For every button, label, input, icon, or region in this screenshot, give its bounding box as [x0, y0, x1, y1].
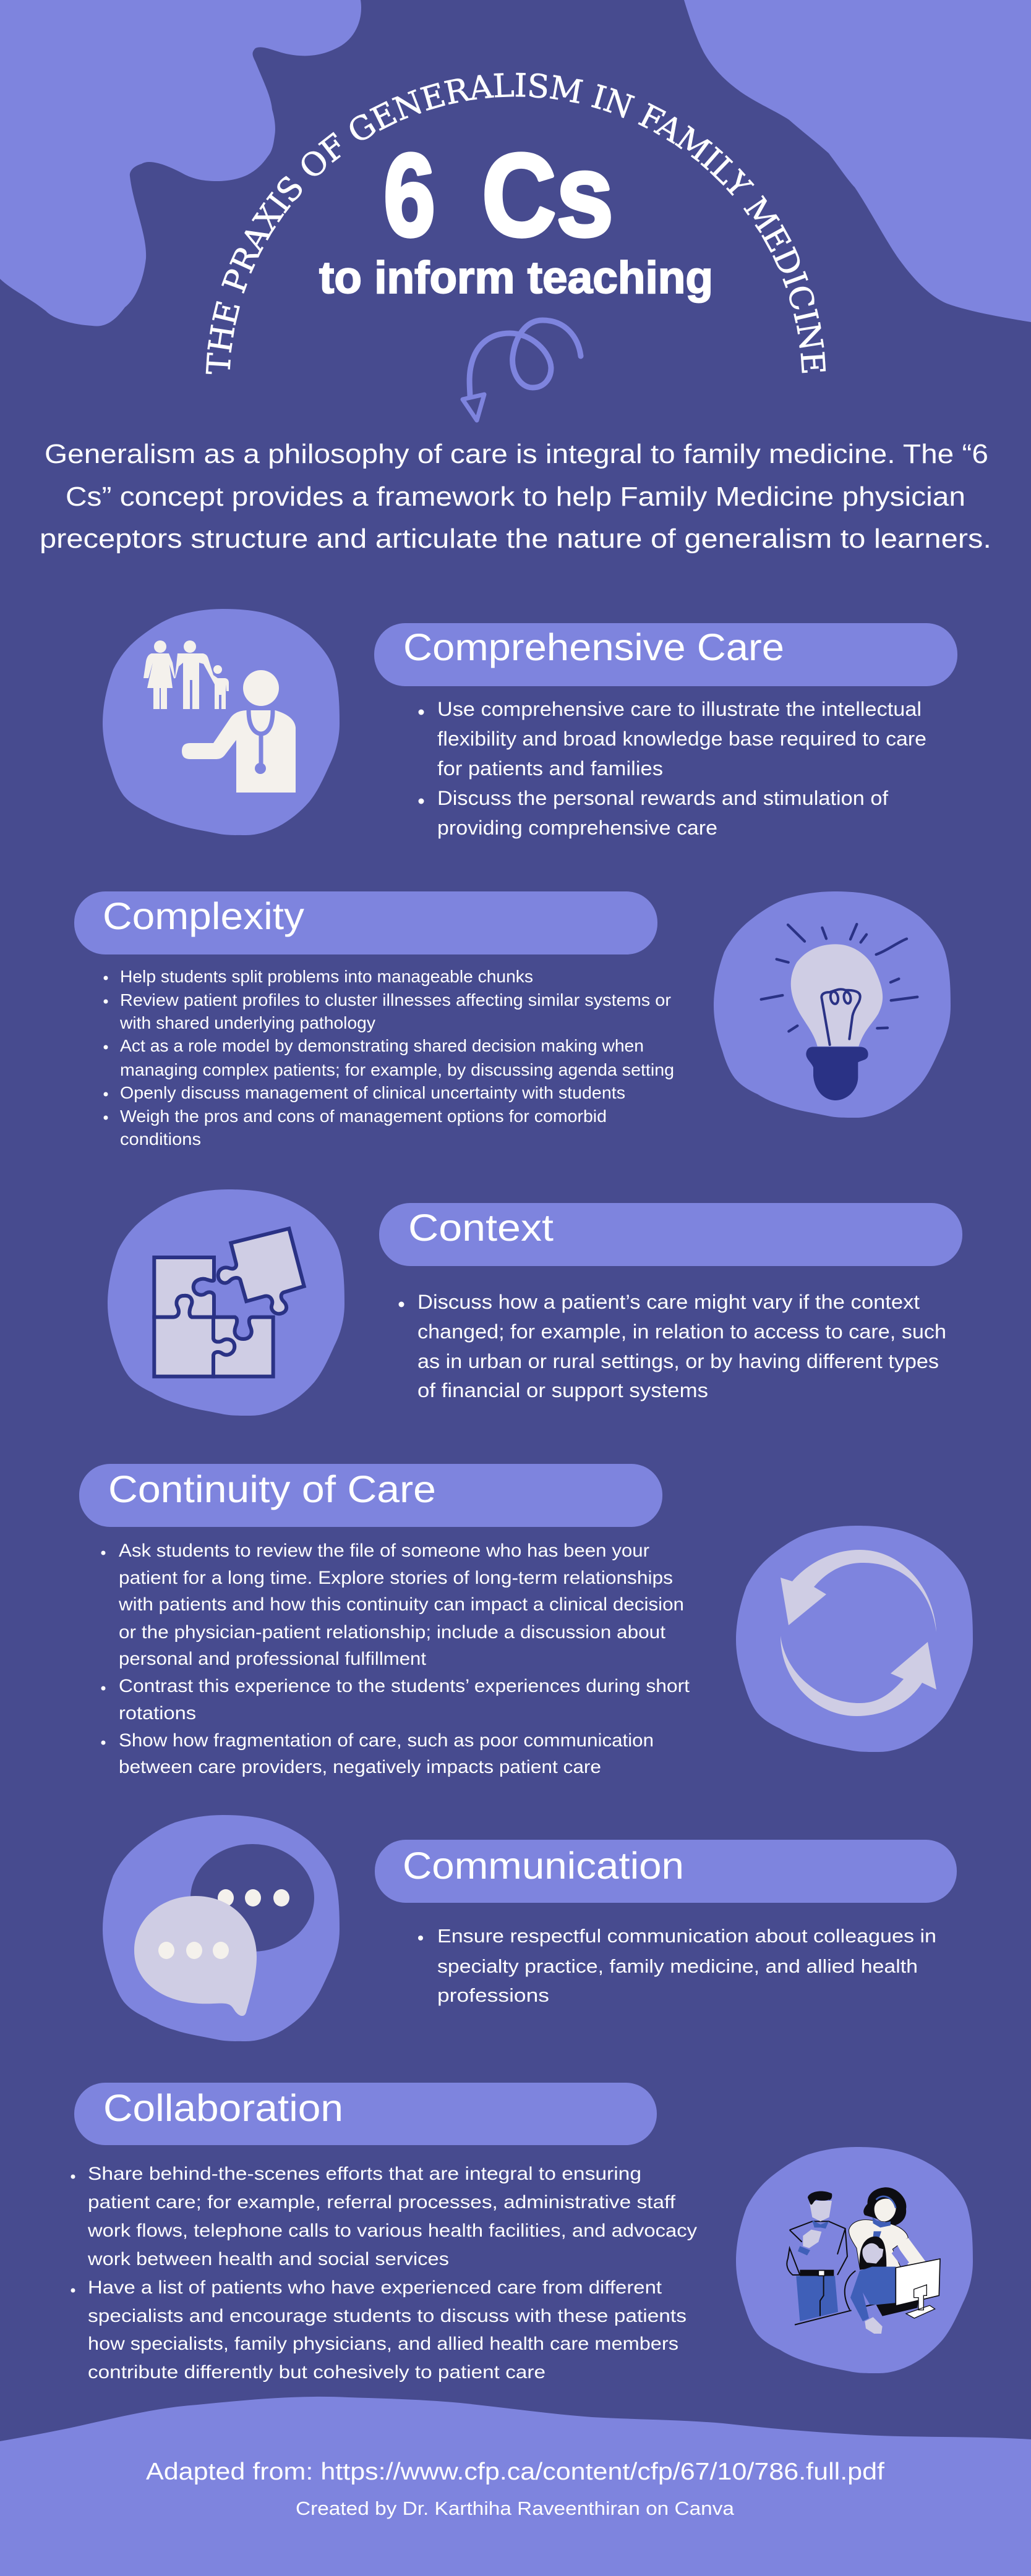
top-right background blob	[684, 0, 1031, 322]
bullet list: Review patient profiles to cluster illnesses affecting similar systems or	[120, 990, 671, 1010]
bullet list: Act as a role model by demonstrating shared decision making when	[120, 1036, 644, 1055]
bullet list: specialists and encourage students to discuss with these patients	[88, 2306, 687, 2326]
footer wave	[0, 2397, 1031, 2576]
bullet list: Ensure respectful communication about colleagues in	[437, 1925, 936, 1947]
bullet list: Openly discuss management of clinical uncertainty with students	[120, 1083, 625, 1102]
heading pill: Comprehensive Care	[403, 626, 784, 668]
bullet list: Help students split problems into manageable chunks	[120, 967, 533, 986]
icon: spiral arrow	[463, 320, 581, 420]
heading pill: Context	[408, 1207, 554, 1249]
bullet list: work flows, telephone calls to various health facilities, and advocacy	[87, 2221, 697, 2241]
panel: communication	[103, 1815, 957, 2041]
intro text	[40, 439, 991, 554]
bullet list: patient for a long time. Explore stories of long-term relationships	[119, 1568, 673, 1588]
bullet list: Discuss the personal rewards and stimulation of	[437, 787, 888, 809]
bullet list: contribute differently but cohesively to patient care	[88, 2362, 545, 2383]
heading pill	[74, 891, 657, 954]
bullet list: rotations	[119, 1703, 196, 1724]
bullet list: providing comprehensive care	[437, 817, 717, 839]
bullet list: changed; for example, in relation to access to care, such	[417, 1320, 946, 1343]
bullet list: Share behind-the-scenes efforts that are integral to ensuring	[88, 2164, 641, 2184]
panel: context	[108, 1189, 962, 1416]
bullet list: as in urban or rural settings, or by having different types	[417, 1350, 939, 1372]
heading pill: Continuity of Care	[108, 1468, 436, 1510]
bullet list: flexibility and broad knowledge base required to care	[437, 728, 926, 750]
heading pill	[379, 1203, 962, 1266]
bullet list: personal and professional fulfillment	[119, 1649, 427, 1669]
heading pill: Complexity	[103, 895, 305, 937]
bullet list: Have a list of patients who have experienced care from different	[88, 2277, 662, 2298]
footer credit line: Created by Dr. Karthiha Raveenthiran on Canva	[296, 2497, 735, 2519]
bullet list: with shared underlying pathology	[119, 1013, 375, 1032]
bullet list: between care providers, negatively impacts patient care	[119, 1757, 601, 1777]
bullet list: for patients and families	[437, 757, 663, 780]
subtitle: to inform teaching	[319, 253, 713, 303]
heading pill: Communication	[403, 1845, 684, 1887]
bullet list	[398, 1291, 946, 1401]
heading pill	[79, 1464, 662, 1527]
main title: 6 Cs: 6	[383, 130, 435, 261]
icon: puzzle	[108, 1189, 344, 1416]
bullet list: how specialists, family physicians, and allied health care members	[88, 2334, 678, 2354]
heading pill	[374, 623, 957, 686]
bullet list: work between health and social services	[87, 2249, 449, 2269]
panel: continuity of care	[79, 1464, 973, 1777]
top-left background blob	[0, 0, 361, 326]
bullet list: Use comprehensive care to illustrate the intellectual	[437, 698, 922, 720]
panel: collaboration	[71, 2083, 973, 2383]
bullet list: Contrast this experience to the students’ experiences during short	[119, 1676, 690, 1696]
main title: 6 Cs	[383, 130, 614, 261]
bullet list	[418, 1925, 936, 2006]
intro text: preceptors structure and articulate the nature of generalism to learners.	[40, 524, 991, 554]
icon: family and doctor	[103, 609, 340, 835]
heading pill	[74, 2083, 657, 2145]
intro text: Cs” concept provides a framework to help Family Medicine physician	[66, 482, 965, 512]
bullet list: Show how fragmentation of care, such as poor communication	[119, 1730, 654, 1751]
curved title: THE PRAXIS OF GENERALISM IN FAMILY MEDICINE	[205, 73, 826, 375]
heading pill: Collaboration	[103, 2087, 343, 2129]
panel: complexity	[74, 891, 951, 1149]
bullet list	[418, 698, 926, 839]
icon: cycle arrows	[736, 1526, 973, 1752]
icon: three colleagues at a computer	[736, 2147, 973, 2373]
bullet list: managing complex patients; for example, by discussing agenda setting	[120, 1060, 674, 1079]
bullet list: or the physician-patient relationship; include a discussion about	[119, 1622, 666, 1643]
bullet list	[104, 967, 674, 1149]
bullet list: patient care; for example, referral processes, administrative staff	[88, 2192, 676, 2213]
intro text: Generalism as a philosophy of care is integral to family medicine. The “6	[45, 439, 988, 469]
bullet list: professions	[437, 1984, 549, 2006]
bullet list	[101, 1541, 690, 1777]
bullet list: conditions	[120, 1129, 201, 1149]
bullet list: Discuss how a patient’s care might vary if the context	[417, 1291, 920, 1313]
footer source line: Adapted from: https://www.cfp.ca/content/cfp/67/10/786.full.pdf	[146, 2459, 884, 2485]
icon: light bulb	[714, 891, 951, 1118]
panel: comprehensive care	[103, 609, 957, 839]
bullet list: of financial or support systems	[417, 1379, 708, 1401]
bullet list: with patients and how this continuity can impact a clinical decision	[118, 1594, 684, 1615]
bullet list: Weigh the pros and cons of management options for comorbid	[120, 1107, 607, 1126]
bullet list	[71, 2164, 697, 2383]
icon: speech bubbles	[103, 1815, 340, 2041]
heading pill	[375, 1840, 957, 1903]
main title: 6 Cs: Cs	[482, 130, 614, 261]
bullet list: Ask students to review the file of someone who has been your	[119, 1541, 649, 1561]
bullet list: specialty practice, family medicine, and allied health	[437, 1955, 918, 1977]
